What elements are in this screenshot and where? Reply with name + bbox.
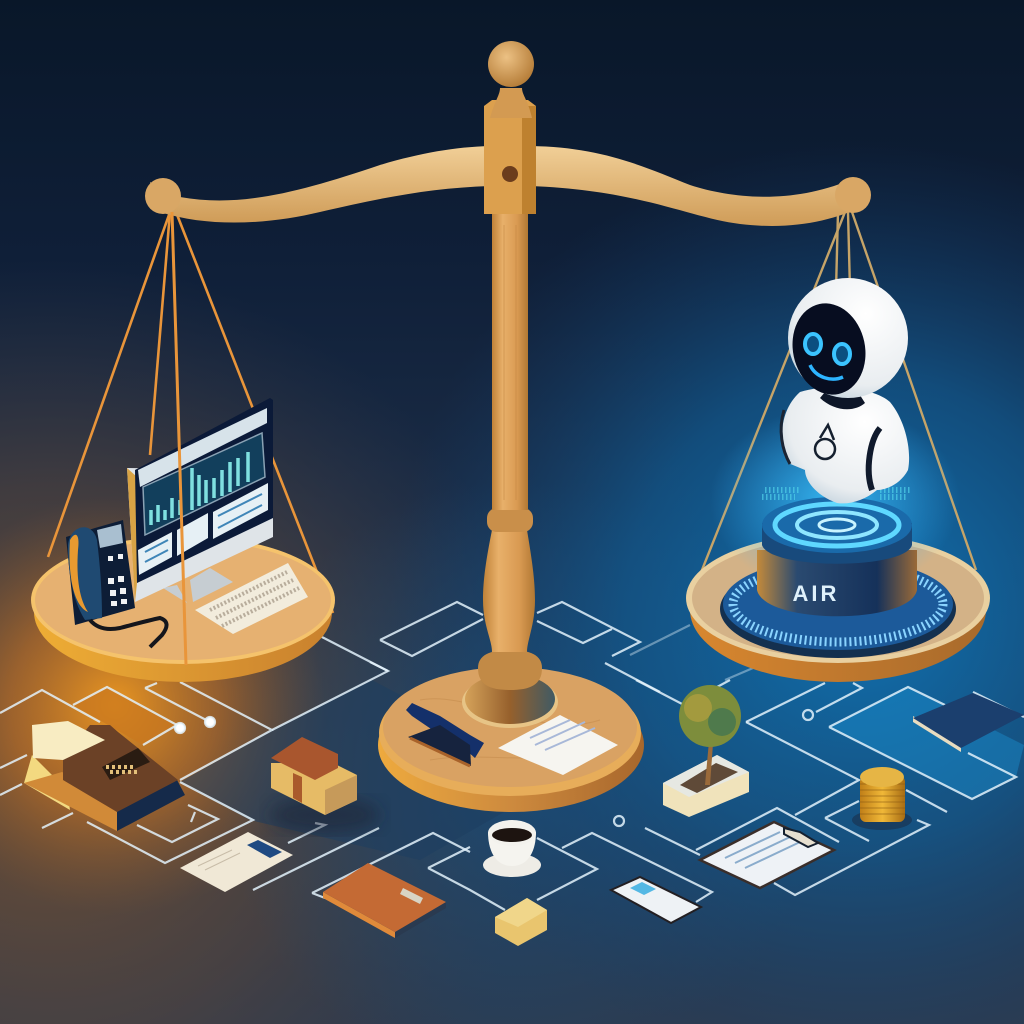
platform label: AIR [793,581,839,606]
robot chest logo [815,425,835,459]
left pan [31,536,335,682]
coffee cup [483,820,541,877]
flowchart lines on floor [0,602,1024,910]
stapler on base [406,703,484,766]
robot head [788,278,908,398]
monitor chart bars [151,452,248,525]
telephone [66,520,167,647]
left front cord [172,212,186,665]
robot body [782,387,909,503]
column [462,214,558,728]
navy book [913,693,1024,752]
beam [150,146,490,223]
stand base [378,667,644,812]
clipboard [700,822,834,888]
right pan [686,533,990,682]
document left [180,832,293,892]
glowing floor tiles [73,680,1024,860]
glowing platform [710,405,960,658]
robot [781,278,909,503]
phone [611,877,701,923]
coin stack [852,767,912,830]
center block and finial [484,41,536,214]
fax machine [24,721,185,831]
left pan back cords [48,212,333,613]
keyboard [195,563,308,634]
boxes [271,737,357,815]
small box [495,898,547,946]
monitor [127,398,273,603]
right pan cords [690,212,976,600]
paper on base [498,715,618,775]
shadow: box [270,797,380,833]
plant [663,685,749,817]
scale stand [145,41,871,812]
monitor stand [163,568,233,603]
orange folder [323,863,446,938]
